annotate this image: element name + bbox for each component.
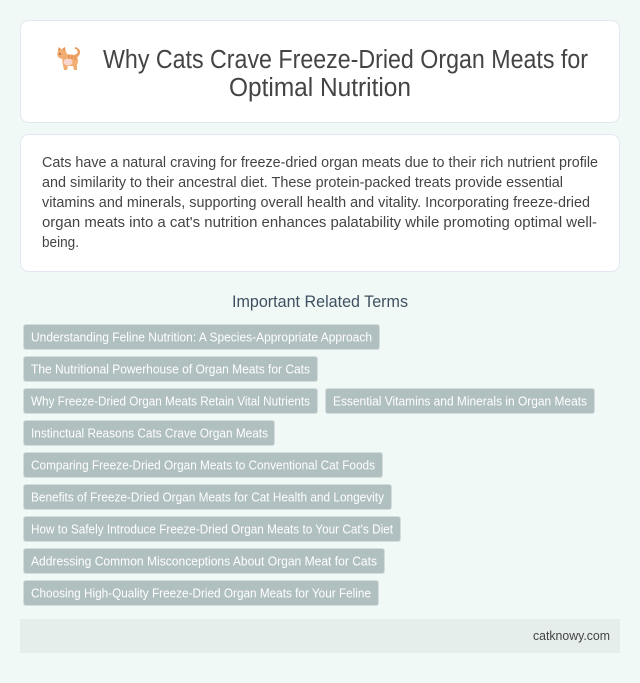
panel: description card <box>20 134 620 272</box>
text block: description: being. <box>42 234 79 251</box>
panel: title card <box>20 20 620 122</box>
text block: description: vitamins and minerals, supporting overall health and vitality. Incorporating freeze-dried <box>42 194 590 211</box>
tag 9: Addressing Common Misconceptions About Organ Meat for Cats <box>31 554 377 568</box>
tag list <box>24 324 594 606</box>
tag 2: The Nutritional Powerhouse of Organ Meats for Cats <box>31 362 310 376</box>
tag 7 <box>24 484 392 510</box>
heading: related terms: Important Related Terms <box>232 293 408 311</box>
text block: description: and similarity to their ancestral diet. These protein-packed treats provide essential <box>42 174 563 191</box>
text block: description: Cats have a natural craving for freeze-dried organ meats due to their rich nutrient profile <box>42 154 598 171</box>
tag 5 <box>24 420 274 446</box>
tag 1 <box>24 324 380 350</box>
footer <box>20 619 620 653</box>
tag 8 <box>24 516 400 542</box>
tag 6 <box>24 452 382 478</box>
tag 5: Instinctual Reasons Cats Crave Organ Meats <box>31 426 268 440</box>
icon: cat <box>57 47 80 70</box>
tag 2 <box>24 356 318 382</box>
tag 7: Benefits of Freeze-Dried Organ Meats for Cat Health and Longevity <box>31 490 384 504</box>
tag 9 <box>24 548 384 574</box>
tag 3: Why Freeze-Dried Organ Meats Retain Vital Nutrients <box>31 394 310 408</box>
footer source text: catknowy.com <box>533 629 610 643</box>
tag 3 <box>24 388 318 414</box>
title: Why Cats Crave Freeze-Dried Organ Meats for <box>103 46 588 74</box>
tag 10: Choosing High-Quality Freeze-Dried Organ Meats for Your Feline <box>31 586 371 600</box>
tag 8: How to Safely Introduce Freeze-Dried Organ Meats to Your Cat's Diet <box>31 522 393 536</box>
tag 1: Understanding Feline Nutrition: A Species-Appropriate Approach <box>31 330 372 344</box>
tag 10 <box>24 580 378 606</box>
tag 6: Comparing Freeze-Dried Organ Meats to Conventional Cat Foods <box>31 458 375 472</box>
text block: description <box>42 154 598 251</box>
tag 4: Essential Vitamins and Minerals in Organ Meats <box>333 394 587 408</box>
tag 4 <box>326 388 594 414</box>
title <box>103 46 588 102</box>
title: Optimal Nutrition <box>229 74 411 102</box>
text block: description: organ meats into a cat's nutrition enhances palatability while promoting optimal well- <box>42 214 597 231</box>
